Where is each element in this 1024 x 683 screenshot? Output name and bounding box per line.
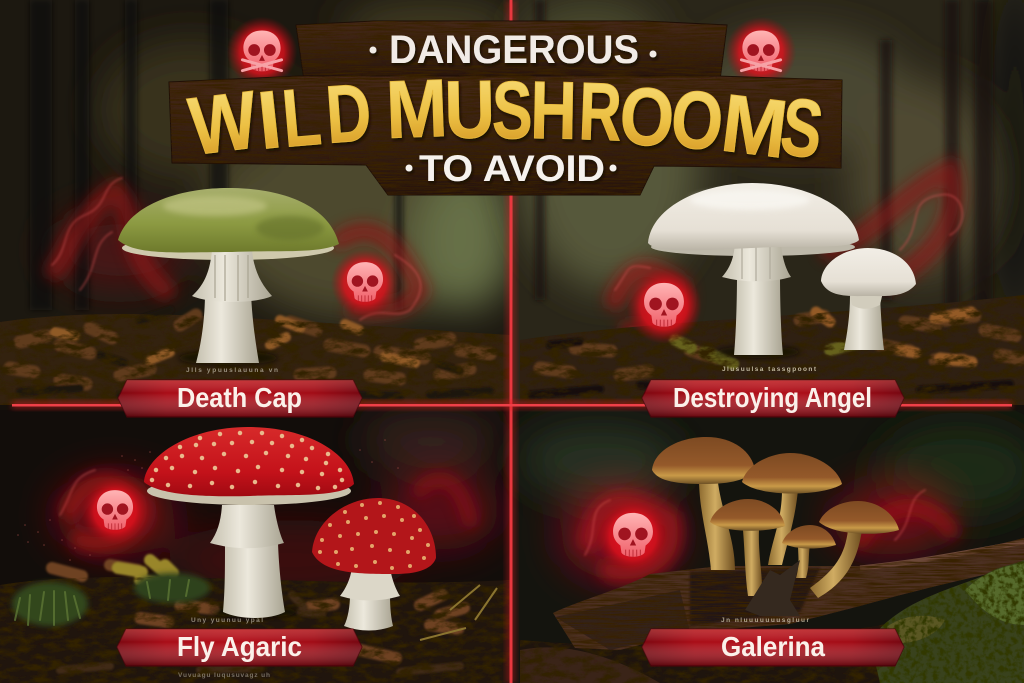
skull icon: galerina: [595, 498, 671, 574]
cap 4: [782, 525, 836, 549]
tiny caption: bottom left: Vuvuagu Iuqusuvagz uh: [178, 672, 270, 679]
stem: [734, 275, 783, 355]
label: galerina: Galerina: [721, 631, 825, 662]
white cap: [648, 183, 859, 250]
sign planks: [169, 21, 842, 195]
gills: [122, 236, 334, 260]
label: fly agaric: [117, 629, 362, 666]
forest floor: top left: [0, 310, 510, 405]
tiny caption: death cap: Jlls ypuuslauuna vn: [186, 367, 278, 374]
mushroom: fly agaric: [144, 427, 436, 630]
label: galerina: [642, 629, 904, 666]
cap spots: [152, 433, 342, 488]
panel background: bottom right dark forest: [513, 410, 1024, 683]
panel background: top left forest: [0, 0, 520, 405]
skull icon: destroying angel: [626, 268, 702, 344]
heading: wild mushrooms: S: [775, 81, 828, 177]
skull icon: top right: [726, 17, 796, 87]
cap 3: [710, 499, 785, 531]
mushroom cluster: galerina: [652, 437, 899, 598]
ring skirt: [722, 243, 791, 282]
heading: wild mushrooms: M: [384, 61, 449, 156]
ring skirt: [192, 250, 272, 302]
mushroom: destroying angel: [648, 183, 916, 358]
forest floor: top right: [520, 295, 1024, 405]
ring skirt: [210, 505, 284, 548]
skull icon: death cap: [331, 249, 399, 317]
tiny caption: fly agaric: Uny yuunuu ypal: [191, 617, 263, 624]
label: death cap: Death Cap: [177, 382, 302, 413]
heading: to avoid: TO AVOID: [419, 148, 605, 189]
heading: wild mushrooms: [184, 61, 828, 177]
forest floor: bottom left: [0, 560, 510, 683]
horizontal divider: [12, 401, 1012, 409]
red smoke clouds: [18, 170, 962, 573]
heading: wild mushrooms: S: [492, 65, 532, 156]
moss: [870, 560, 1024, 683]
heading: wild mushrooms: R: [577, 66, 623, 159]
title sign: [169, 21, 842, 195]
label: destroying angel: Destroying Angel: [673, 382, 872, 413]
heading: dangerous: DANGEROUS: [389, 28, 639, 72]
gills: [651, 238, 855, 256]
panel background: bottom left dark forest: [0, 410, 510, 683]
label: death cap: [118, 380, 362, 417]
panel background: top right forest: [513, 0, 1024, 405]
heading: wild mushrooms: L: [279, 71, 324, 165]
label: fly agaric: Fly Agaric: [177, 631, 302, 662]
heading: wild mushrooms: O: [617, 70, 677, 165]
heading: wild mushrooms: U: [444, 64, 496, 156]
cap 5: [819, 501, 899, 534]
forest floor and log: bottom right: [520, 538, 1024, 683]
stem: [223, 543, 285, 618]
heading: wild mushrooms: M: [717, 77, 792, 175]
heading: wild mushrooms: O: [667, 72, 727, 168]
heading: wild mushrooms: W: [184, 74, 262, 173]
small companion mushroom: [821, 248, 916, 350]
tiny caption: destroying angel: Jlusuulsa tassgpoont: [722, 366, 817, 373]
stems: [699, 470, 735, 570]
cap 1: [652, 437, 755, 484]
gills: [147, 477, 351, 505]
cap 2: [742, 453, 842, 494]
red cap: [144, 427, 354, 496]
small fly agaric: [312, 498, 436, 630]
mushroom: death cap: [118, 188, 339, 365]
heading: wild mushrooms: I: [253, 74, 286, 167]
skull icon: fly agaric: [81, 477, 149, 545]
skull icon: top left: [227, 17, 297, 87]
vertical divider: [506, 0, 516, 683]
fallen log: [553, 538, 1024, 650]
heading: wild mushrooms: H: [530, 63, 577, 157]
moss: [12, 573, 210, 626]
roots at log base: [745, 560, 800, 616]
green cap: [118, 188, 339, 252]
stem: [196, 292, 259, 363]
tiny caption: galerina: Jn nluuuuuuusgluur: [721, 617, 809, 624]
heading: wild mushrooms: D: [323, 67, 374, 161]
